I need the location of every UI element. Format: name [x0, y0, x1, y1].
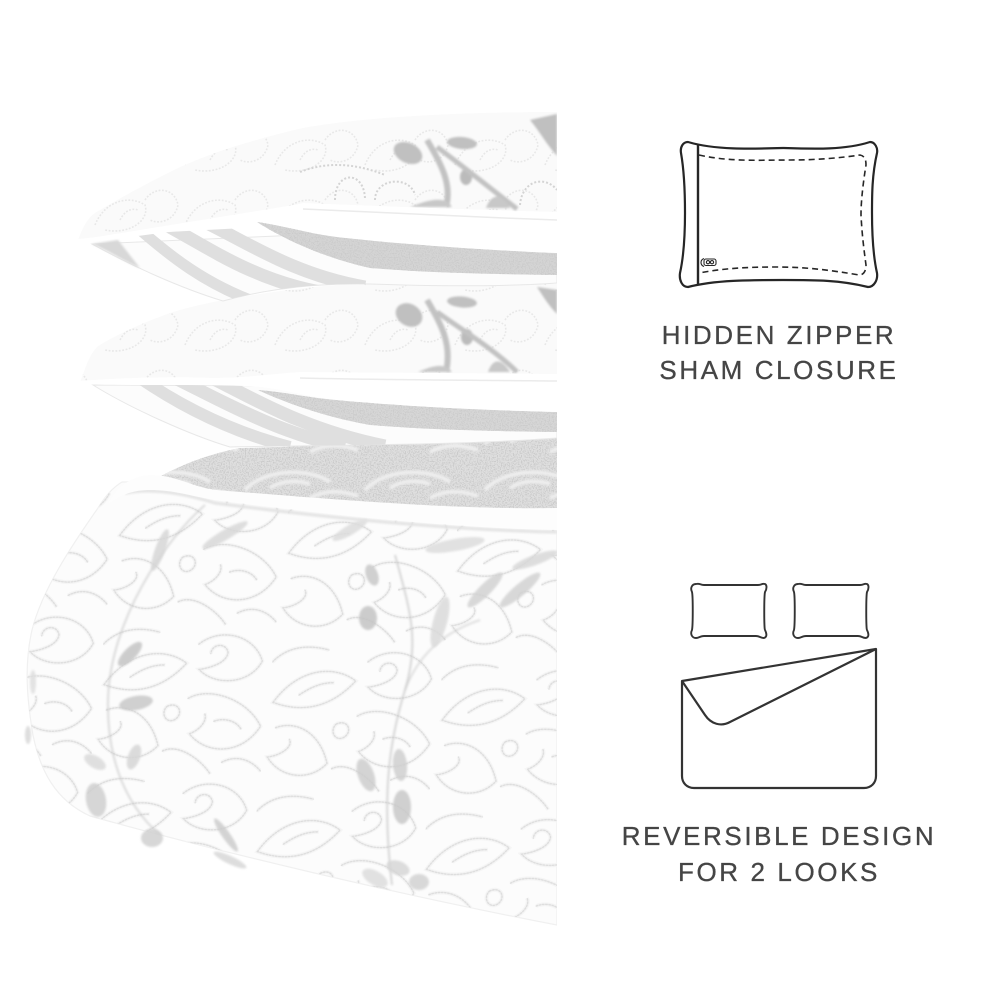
- caption: reversible design: REVERSIBLE DESIGN: [622, 821, 936, 851]
- shadow under quilt piping: [125, 491, 557, 532]
- zipper pull: [701, 258, 716, 266]
- folded quilt: [25, 480, 559, 925]
- upper pillow sham: [78, 112, 557, 303]
- bedding outline: [682, 649, 876, 788]
- left sham: [691, 584, 766, 638]
- upper sham faint arches: [300, 165, 557, 205]
- quilt edge piping: [108, 475, 557, 530]
- right sham: [793, 584, 868, 638]
- stitched line: [699, 155, 866, 275]
- sham outline: [680, 142, 877, 287]
- quilt reverse side band: [108, 436, 557, 532]
- caption: reversible design: FOR 2 LOOKS: [678, 857, 880, 887]
- infographic canvas: [24, 112, 932, 926]
- caption: reversible design: [622, 821, 936, 887]
- caption: hidden zipper: SHAM CLOSURE: [659, 355, 899, 385]
- product photo: quilt and shams stack: [25, 112, 559, 925]
- lower pillow sham: [78, 284, 557, 447]
- upper sham flange: [136, 204, 557, 253]
- lower sham flange: [78, 372, 557, 412]
- printed leaves: [25, 516, 559, 891]
- lower sham printed vine: [391, 287, 557, 372]
- lower sham heather stripe: [258, 390, 557, 432]
- upper sham printed vine: [390, 114, 557, 209]
- icon: pillow sham with hidden zipper: [680, 142, 877, 287]
- turned down corner: [682, 649, 876, 724]
- lower sham underside with stripes: [93, 385, 557, 447]
- printed vine stems: [108, 505, 480, 885]
- upper sham underside with stripes: [92, 235, 557, 301]
- icon: two shams and reversible bedding: [682, 584, 876, 788]
- caption: hidden zipper: [659, 320, 899, 385]
- upper sham heather stripe: [257, 222, 557, 275]
- caption: hidden zipper: HIDDEN ZIPPER: [662, 320, 896, 350]
- zipper seam: [697, 145, 699, 284]
